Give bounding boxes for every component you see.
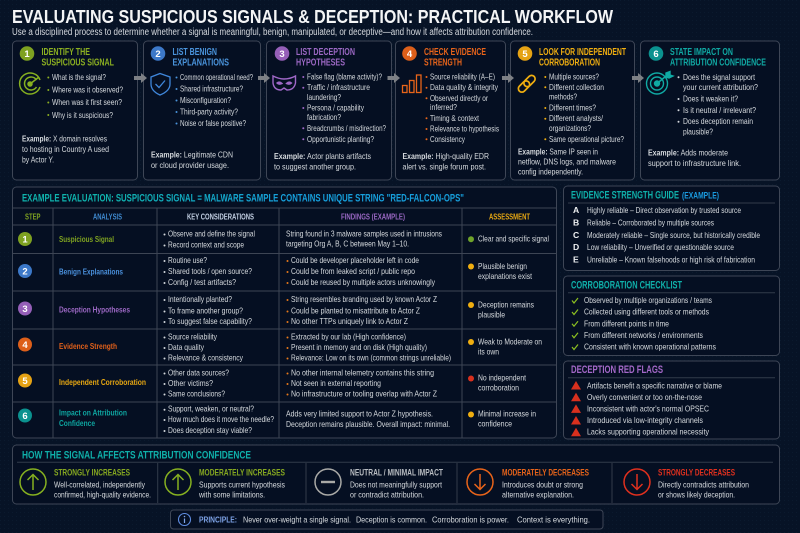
panel: step 3 deception: [266, 41, 392, 180]
step 5 heading: LOOK FOR INDEPENDENT: [539, 47, 627, 58]
row 1: Record context and scope: [168, 240, 244, 250]
strongly decreases: or shows likely deception.: [658, 490, 735, 500]
step 4 questions: Consistency: [430, 135, 466, 144]
step 4 heading: [424, 47, 486, 68]
step 3 questions: Breadcrumbs / misdirection?: [307, 124, 386, 133]
guide grades: Unreliable – Known falsehoods or high risk of fabrication: [587, 256, 755, 264]
red flag items: Inconsistent with actor's normal OPSEC: [587, 405, 709, 414]
step 6 questions: plausible?: [683, 128, 713, 136]
icon: mask: [273, 76, 296, 90]
row 2: Config / test artifacts?: [168, 278, 236, 287]
moderately decreases: [467, 468, 589, 500]
panel: step 4 evidence: [396, 41, 506, 180]
checklist items: [572, 296, 716, 352]
row 5: Other data sources?: [168, 368, 229, 378]
panel: step 5 corroboration: [510, 41, 634, 180]
step 2 example: or cloud provider usage.: [151, 161, 229, 170]
moderately decreases: Introduces doubt or strong: [502, 481, 583, 490]
step 3 heading: LIST DECEPTION: [296, 47, 355, 58]
row 5: corroboration: [478, 384, 519, 392]
checklist heading: CORROBORATION CHECKLIST: [571, 280, 682, 292]
row 2: Benign Explanations: [59, 266, 123, 276]
step 1 badge: 1: [24, 49, 30, 60]
step 4 example: alert vs. single forum post.: [402, 162, 486, 172]
guide grades: D: [573, 242, 579, 252]
red flag items: Introduced via low-integrity channels: [587, 416, 703, 425]
row 6: confidence: [478, 420, 512, 428]
step 5 questions: [544, 72, 624, 144]
step 4 questions: Data quality & integrity: [430, 83, 499, 92]
row 6: Deception remains plausible. Overall impact: minimal.: [286, 420, 450, 429]
row 2: [18, 256, 533, 287]
step 4 questions: Timing & context: [430, 114, 480, 123]
guide grades: Moderately reliable – Single source, but historically credible: [587, 231, 760, 240]
panel: step 6 impact: [640, 41, 780, 180]
principle text: [199, 515, 590, 525]
row 3: To suggest false capability?: [168, 317, 252, 326]
row 2: Plausible benign: [478, 262, 527, 271]
row 5: Other victims?: [168, 379, 213, 388]
table header row: KEY CONSIDERATIONS: [187, 212, 254, 222]
neutral: NEUTRAL / MINIMAL IMPACT: [350, 468, 443, 478]
step 5 example: config independently.: [518, 168, 583, 176]
step 1 questions: Why is it suspicious?: [52, 111, 113, 120]
row 4: [18, 332, 542, 362]
row 2: Could be developer placeholder left in code: [291, 256, 419, 265]
step 4 heading: CHECK EVIDENCE: [424, 47, 486, 58]
step 5 questions: Different analysts/: [549, 114, 604, 123]
step 3 example: [274, 152, 371, 172]
row 1: 1: [22, 234, 28, 246]
row 3: String resembles branding used by known Actor Z: [291, 295, 437, 304]
step 3 questions: False flag (blame activity)?: [307, 72, 382, 82]
red flag items: Overly convenient or too on-the-nose: [587, 393, 702, 402]
row 3: Deception remains: [478, 300, 534, 310]
step 1 questions: Where was it observed?: [52, 86, 123, 94]
row 3: To frame another group?: [168, 306, 243, 316]
table header row: FINDINGS (EXAMPLE): [341, 212, 405, 222]
step 4 questions: Source reliability (A–E): [430, 72, 495, 82]
step 3 example: Example: Actor plants artifacts: [274, 152, 371, 161]
step 5 questions: organizations?: [549, 124, 591, 133]
guide heading: EVIDENCE STRENGTH GUIDE: [571, 190, 679, 202]
step 6 questions: Does it weaken it?: [683, 94, 738, 104]
icon: info: [178, 514, 190, 526]
step 4 example: [402, 152, 489, 172]
confidence heading: HOW THE SIGNAL AFFECTS ATTRIBUTION CONFIDENCE: [22, 449, 251, 461]
step 3 badge: 3: [279, 49, 285, 60]
step 6 heading: STATE IMPACT ON: [670, 47, 733, 58]
row 6: Support, weaken, or neutral?: [168, 405, 254, 414]
guide grades: C: [573, 230, 579, 240]
step 5 questions: Multiple sources?: [549, 72, 599, 82]
moderately increases: MODERATELY INCREASES: [199, 468, 285, 478]
step 3 questions: fabrication?: [307, 113, 341, 122]
step 3 heading: [296, 47, 355, 68]
row 1: targeting Org A, B, C between May 1–10.: [286, 240, 409, 248]
step 4 questions: Observed directly or: [430, 94, 488, 103]
step 5 example: netflow, DNS logs, and malware: [518, 158, 616, 166]
row 2: 2: [22, 266, 28, 278]
step 1 questions: When was it first seen?: [52, 98, 122, 107]
principle text: PRINCIPLE:: [199, 515, 237, 525]
principle text: Corroboration is power.: [432, 516, 509, 525]
step 6 example: support to infrastructure link.: [648, 159, 741, 168]
step 5 heading: CORROBORATION: [539, 58, 600, 68]
panel: corroboration checklist: [564, 276, 780, 356]
row 2: Shared tools / open source?: [168, 267, 252, 276]
subtitle: Use a disciplined process to determine whether a signal is meaningful, benign, manipulated, or deceptive—and how it affects attribution confidence.: [12, 27, 533, 38]
row 6: [18, 405, 536, 435]
panel: signal effect on confidence: [12, 445, 780, 504]
neutral: or contradict attribution.: [350, 490, 424, 500]
step 2 questions: Shared infrastructure?: [180, 84, 243, 94]
strongly decreases: STRONGLY DECREASES: [658, 468, 735, 478]
step 5 questions: Same operational picture?: [549, 135, 624, 144]
strongly increases: confirmed, high-quality evidence.: [54, 490, 151, 500]
step 3 questions: Persona / capability: [307, 104, 365, 112]
red flag items: Artifacts benefit a specific narrative or blame: [587, 381, 722, 390]
strongly increases: Well-correlated, independently: [54, 481, 146, 490]
arrows between steps: [134, 73, 644, 83]
moderately decreases: alternative explanation.: [502, 490, 574, 500]
table header row: ASSESSMENT: [489, 212, 530, 222]
step 2 example: Example: Legitimate CDN: [151, 150, 233, 160]
step 2 example: [151, 150, 233, 170]
strongly decreases: [624, 468, 749, 500]
row 1: String found in 3 malware samples used in intrusions: [286, 230, 442, 238]
row 4: Source reliability: [168, 332, 218, 342]
step 5 questions: Different times?: [549, 104, 596, 112]
row 5: Not seen in external reporting: [291, 379, 381, 388]
step 2 questions: Noise or false positive?: [180, 119, 246, 128]
step 1 heading: SUSPICIOUS SIGNAL: [42, 58, 114, 68]
row 2: Could be from leaked script / public repo: [291, 267, 415, 276]
moderately increases: with some limitations.: [198, 490, 265, 500]
step 3 questions: Opportunistic planting?: [307, 135, 374, 144]
step 4 questions: [426, 72, 499, 144]
step 5 example: Example: Same IP seen in: [518, 148, 598, 156]
row 3: No other TTPs uniquely link to Actor Z: [291, 317, 408, 326]
row 6: Adds very limited support to Actor Z hypothesis.: [286, 410, 433, 418]
checklist items: From different networks / environments: [584, 331, 703, 340]
row 5: 5: [22, 376, 28, 387]
strongly decreases: Directly contradicts attribution: [658, 481, 749, 490]
step 1 example: to hosting in Country A used: [22, 145, 109, 154]
red flag items: Lacks supporting operational necessity: [587, 428, 710, 437]
row 6: Confidence: [59, 418, 95, 428]
neutral: [315, 468, 443, 500]
principle text: Context is everything.: [517, 516, 590, 525]
checklist items: Observed by multiple organizations / teams: [584, 296, 712, 305]
moderately decreases: MODERATELY DECREASES: [502, 468, 589, 478]
strongly increases: STRONGLY INCREASES: [54, 468, 130, 478]
guide grades: A: [573, 205, 579, 215]
moderately increases: [165, 468, 285, 500]
step 6 heading: [670, 47, 766, 68]
row 3: Intentionally planted?: [168, 295, 232, 304]
red flag items: [571, 381, 722, 437]
table title: EXAMPLE EVALUATION: SUSPICIOUS SIGNAL = MALWARE SAMPLE CONTAINS UNIQUE STRING "RED-FALCON-OPS": [22, 192, 464, 204]
step 2 questions: Third-party activity?: [180, 108, 238, 116]
callout: principle: [170, 510, 603, 529]
row 6: Minimal increase in: [478, 410, 536, 418]
panel: deception red flags: [564, 361, 780, 439]
row 3: Could be planted to misattribute to Actor Z: [291, 306, 420, 316]
row 1: Suspicious Signal: [59, 234, 114, 244]
step 2 badge: 2: [155, 49, 161, 60]
strongly increases: [20, 468, 151, 500]
panel: evidence strength guide: [564, 186, 780, 270]
row 6: 6: [22, 411, 28, 422]
panel: example evaluation table: [12, 187, 556, 438]
row 2: Routine use?: [168, 256, 207, 265]
checklist items: From different points in time: [584, 319, 669, 328]
step 6 example: [648, 148, 741, 168]
step 6 questions: [678, 73, 758, 136]
step 6 questions: your current attribution?: [683, 83, 758, 92]
step 2 questions: Common operational need?: [180, 73, 253, 82]
step 6 example: Example: Adds moderate: [648, 148, 728, 158]
step 4 questions: Relevance to hypothesis: [430, 124, 499, 134]
row 6: How much does it move the needle?: [168, 415, 274, 424]
guide grades: B: [573, 218, 579, 228]
red flags heading: DECEPTION RED FLAGS: [571, 364, 663, 376]
row 1: [18, 230, 549, 250]
icon: bars: [402, 75, 421, 92]
row 6: Impact on Attribution: [59, 408, 127, 418]
row 5: Independent Corroboration: [59, 377, 146, 387]
row 2: explanations exist: [478, 272, 533, 281]
step 3 questions: Traffic / infrastructure: [307, 83, 370, 92]
row 1: Clear and specific signal: [478, 234, 549, 244]
step 1 questions: What is the signal?: [52, 73, 106, 82]
row 2: Could be reused by multiple actors unknowingly: [291, 278, 436, 287]
step 3 questions: [302, 72, 386, 144]
moderately increases: Supports current hypothesis: [199, 481, 285, 490]
step 1 questions: [47, 73, 123, 120]
row 5: [18, 368, 527, 398]
row 5: Same conclusions?: [168, 390, 225, 398]
row 4: Present in memory and on disk (High quality): [291, 343, 427, 352]
row 5: No infrastructure or tooling overlap with Actor Z: [291, 390, 437, 398]
step 5 questions: Different collection: [549, 83, 604, 92]
table header row: [25, 212, 530, 222]
row 3: 3: [22, 304, 28, 315]
step 3 questions: laundering?: [307, 93, 341, 102]
icon: target: [646, 72, 673, 94]
step 1 example: [22, 134, 109, 164]
neutral: Does not meaningfully support: [350, 481, 443, 490]
guide grades: Highly reliable – Direct observation by trusted source: [587, 206, 741, 215]
row 4: Data quality: [168, 343, 205, 352]
step 4 badge: 4: [407, 49, 413, 60]
row 3: [18, 295, 534, 326]
step 2 heading: EXPLANATIONS: [172, 58, 229, 68]
step 1 heading: IDENTIFY THE: [42, 47, 90, 58]
checklist items: Collected using different tools or methods: [584, 308, 709, 317]
step 3 heading: HYPOTHESES: [296, 58, 345, 68]
step 5 example: [518, 148, 616, 176]
step 2 heading: [172, 47, 229, 68]
step 4 example: Example: High-quality EDR: [402, 152, 489, 161]
step 6 badge: 6: [653, 49, 659, 60]
row 6: Does deception stay viable?: [168, 426, 252, 435]
step 4 questions: inferred?: [430, 103, 457, 112]
step 2 questions: [176, 73, 253, 128]
guide grades: Reliable – Corroborated by multiple sources: [587, 218, 714, 228]
row 4: Relevance: Low on its own (common strings unreliable): [291, 354, 451, 362]
panel: step 2 benign: [144, 41, 260, 180]
row 3: plausible: [478, 310, 505, 320]
icon: radar: [20, 73, 40, 94]
row 4: Relevance & consistency: [168, 354, 244, 362]
step 6 questions: Does the signal support: [683, 73, 756, 82]
row 4: Evidence Strength: [59, 341, 117, 351]
step 1 example: by Actor Y.: [22, 156, 54, 164]
step 4 heading: STRENGTH: [424, 58, 462, 68]
title: EVALUATING SUSPICIOUS SIGNALS & DECEPTION: PRACTICAL WORKFLOW: [12, 6, 613, 27]
guide grades: Low reliability – Unverified or questionable source: [587, 243, 734, 252]
step 3 example: to suggest another group.: [274, 162, 356, 172]
row 1: Observe and define the signal: [168, 230, 255, 238]
guide heading: (EXAMPLE): [682, 191, 719, 201]
principle text: Never over-weight a single signal.: [243, 516, 351, 525]
panel: step 1 identify: [12, 41, 138, 180]
row 4: Extracted by our lab (High confidence): [291, 332, 406, 342]
step 1 heading: [42, 47, 114, 68]
checklist items: Consistent with known operational patterns: [584, 343, 716, 352]
row 4: Weak to Moderate on: [478, 338, 542, 346]
step 6 questions: Is it neutral / irrelevant?: [683, 106, 756, 115]
row 5: No other internal telemetry contains this string: [291, 368, 434, 378]
step 6 questions: Does deception remain: [683, 117, 753, 126]
table header row: STEP: [25, 212, 41, 222]
row 5: No independent: [478, 374, 527, 382]
step 1 example: Example: X domain resolves: [22, 134, 107, 144]
step 5 badge: 5: [522, 49, 528, 60]
icon: shield: [151, 74, 170, 95]
row 3: Deception Hypotheses: [59, 305, 130, 315]
step 2 heading: LIST BENIGN: [172, 47, 217, 58]
guide grades: E: [573, 254, 579, 264]
row 4: 4: [22, 340, 28, 351]
step 2 questions: Misconfiguration?: [180, 96, 231, 105]
step 5 heading: [539, 47, 627, 68]
table header row: ANALYSIS: [93, 212, 122, 222]
principle text: Deception is common.: [356, 516, 427, 525]
icon: chain link: [517, 74, 537, 94]
row 4: its own: [478, 348, 499, 356]
guide grades: [573, 205, 760, 264]
step 5 questions: methods?: [549, 92, 577, 102]
